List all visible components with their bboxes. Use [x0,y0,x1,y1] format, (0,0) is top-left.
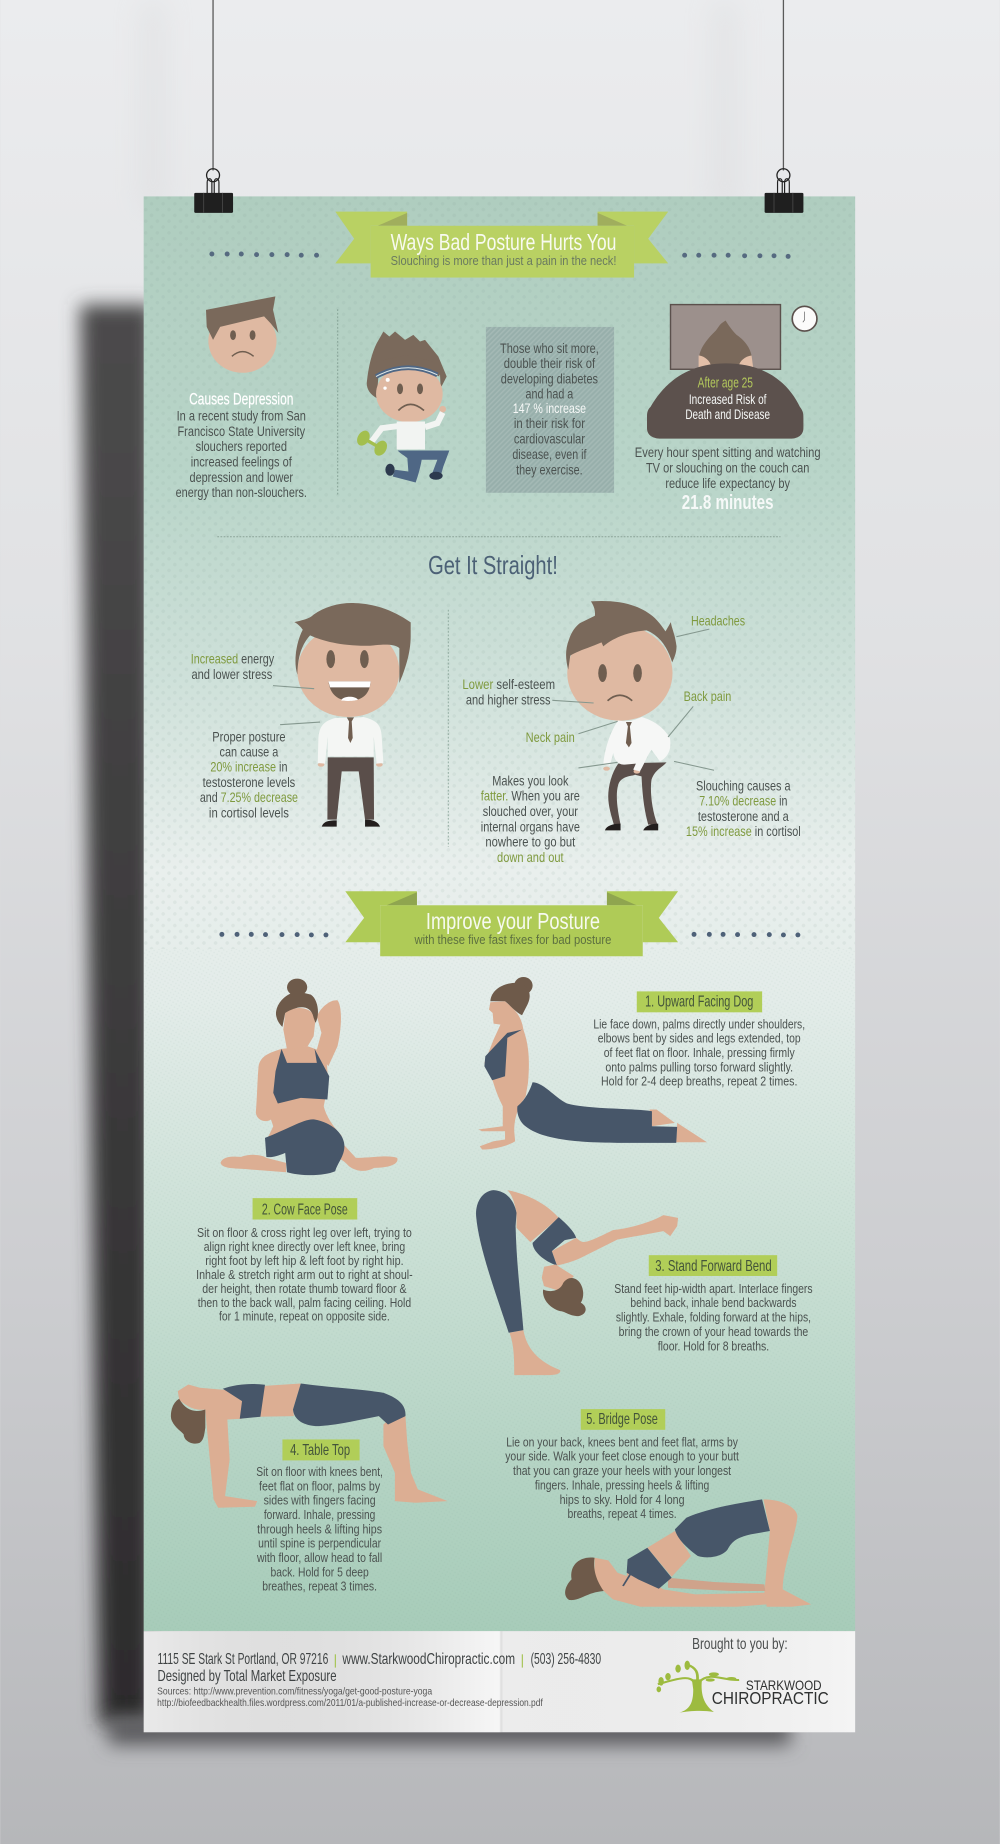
text: table top instructions: breathes, repeat 3 times. [262,1580,377,1594]
text: upward facing dog instructions: Hold for 2-4 deep breaths, repeat 2 times. [601,1074,797,1088]
callout: slouching causes: 15% increase in cortisol [686,824,801,839]
logo: starkwood chiropractic: CHIROPRACTIC [712,1688,829,1708]
text: cow face instructions: Inhale & stretch right arm out to right at shoul- [196,1268,413,1282]
callout: increased energy: Increased energy [191,652,274,667]
text: table top instructions [256,1465,383,1594]
logo: starkwood chiropractic [657,1661,829,1713]
footer: contact details: (503) 256-4830 [531,1651,601,1668]
label: table top: 4. Table Top [290,1442,350,1459]
callout: proper posture [200,722,320,821]
text: upward facing dog instructions [593,1017,805,1088]
banner: ways bad posture hurts you [335,212,668,278]
icon: exercising man with headband [354,332,449,482]
footer: sources: http://biofeedbackhealth.files.wordpress.com/2011/01/a-published-increase-or-decrease-depression.pdf [157,1698,543,1709]
callout: increased energy [191,652,314,689]
text: upward facing dog instructions: Lie face down, palms directly under shoulders, [593,1017,805,1031]
text: table top instructions: sides with fingers facing [264,1494,376,1508]
subheading: with these five fast fixes for bad posture [414,933,611,947]
text: cow face instructions: right foot by left hip & left foot by right hip. [205,1254,404,1268]
text: cow face instructions: Sit on floor & cross right leg over left, trying to [197,1226,412,1240]
callout: makes you look fatter: slouched over, your [483,804,578,819]
callout: makes you look fatter: nowhere to go but [485,835,576,850]
label: bridge pose [581,1409,665,1430]
icon: tv and couch viewer: Death and Disease [685,407,770,422]
callout: neck pain: Neck pain [526,730,575,745]
icon: tv and couch viewer [647,305,803,439]
text: table top instructions: Sit on floor with knees bent, [256,1465,383,1479]
text: causes depression: In a recent study from San [177,408,306,423]
text: causes depression: slouchers reported [196,439,287,454]
footer: contact details: 1115 SE Stark St Portland, OR 97216 [158,1651,328,1668]
text: cow face instructions: align right knee directly over left knee, bring [204,1240,405,1254]
text: table top instructions: back. Hold for 5 deep [270,1565,369,1579]
text: forward bend instructions: floor. Hold for 8 breaths. [658,1339,769,1353]
text: table top instructions: until spine is perpendicular [258,1537,382,1551]
callout: proper posture: and 7.25% decrease [200,790,298,805]
logo: starkwood chiropractic: STARKWOOD [746,1678,822,1693]
text: bridge pose instructions: hips to sky. Hold for 4 long [560,1493,685,1507]
binder clip left [194,169,233,213]
character: slouching man [566,601,677,830]
footer: contact details: Designed by Total Market Exposure [158,1668,337,1685]
text: table top instructions: with floor, allow head to fall [256,1551,382,1565]
text: upward facing dog instructions: onto palms pulling torso forward slightly. [605,1060,793,1074]
footer: sources [157,1687,543,1709]
subheading: Slouching is more than just a pain in the neck! [391,254,616,268]
dotted rule left [209,252,319,258]
callout: headaches: Headaches [691,613,745,628]
panel: diabetes statistic [486,327,614,493]
text: bridge pose instructions: Lie on your back, knees bent and feet flat, arms by [506,1436,738,1450]
callout: proper posture: in cortisol levels [209,806,289,821]
label: stand forward bend: 3. Stand Forward Bend [655,1258,772,1275]
dotted rule right lower [692,932,800,937]
callout: makes you look fatter [481,762,618,865]
callout: slouching causes: Slouching causes a [696,778,791,793]
callout: neck pain [526,721,618,745]
heading: Ways Bad Posture Hurts You [391,229,616,255]
label: cow face pose [253,1198,357,1220]
dotted rule right [682,253,791,259]
callout: lower self-esteem: and higher stress [466,692,551,707]
label: table top [282,1439,360,1460]
text: cow face instructions: der height, then rotate thumb toward floor & [202,1282,407,1296]
hanging wire left [212,0,214,171]
text: bridge pose instructions: that you can graze your heels with your longest [513,1464,731,1478]
callout: lower self-esteem [462,677,594,707]
label: stand forward bend [649,1255,777,1276]
text: table top instructions: forward. Inhale, pressing [264,1508,375,1522]
panel: diabetes statistic: in their risk for [514,416,585,431]
text: causes depression [176,391,307,500]
icon: tv and couch viewer: After age 25 [698,375,753,391]
callout: proper posture: can cause a [220,745,279,760]
callout: headaches [676,613,745,637]
callout: slouching causes: testosterone and a [698,809,789,824]
poster [144,196,855,1732]
callout: lower self-esteem: Lower self-esteem [462,677,555,692]
text: life expectancy: reduce life expectancy by [665,476,790,491]
callout: back pain: Back pain [684,689,731,704]
heading: get it straight: Get It Straight! [428,552,558,580]
label: cow face pose: 2. Cow Face Pose [262,1201,348,1218]
binder clip right [765,169,803,213]
figure: stand forward bend [476,1190,678,1375]
text: cow face instructions: for 1 minute, repeat on opposite side. [219,1310,390,1324]
figure: bridge pose [565,1499,811,1607]
label: upward facing dog: 1. Upward Facing Dog [645,993,753,1010]
text: forward bend instructions: behind back, inhale bend backwards [630,1296,797,1310]
panel: diabetes statistic: double their risk of [504,356,595,371]
text: bridge pose instructions: fingers. Inhale, pressing heels & lifting [535,1478,709,1492]
text: table top instructions: feet flat on floor, palms by [259,1479,381,1493]
text: life expectancy: Every hour spent sitting and watching [635,445,821,460]
panel: diabetes statistic: developing diabetes [501,371,598,386]
footer: sources: Sources: http://www.prevention.com/fitness/yoga/get-good-posture-yoga [157,1687,432,1698]
text: table top instructions: through heels & lifting hips [257,1522,382,1536]
text: bridge pose instructions: your side. Walk your feet close enough to your butt [505,1450,739,1464]
text: forward bend instructions: Stand feet hip-width apart. Interlace fingers [614,1282,813,1296]
panel: diabetes statistic: they exercise. [516,462,583,477]
text: forward bend instructions: bring the crown of your head towards the [619,1325,808,1339]
callout: makes you look fatter: fatter. When you are [481,789,580,804]
callout: proper posture: testosterone levels [203,775,295,790]
panel: diabetes statistic: cardiovascular [514,431,585,446]
icon: sad face [206,296,278,373]
figure: cow face pose [220,979,397,1175]
character: good posture man [294,603,411,827]
footer: contact details: www.StarkwoodChiropractic.com [342,1651,515,1668]
figure: upward facing dog [478,977,707,1150]
text: cow face instructions [196,1226,413,1324]
callout: proper posture: 20% increase in [210,759,287,774]
callout: slouching causes [674,761,801,839]
text: upward facing dog instructions: of feet flat on floor. Inhale, pressing firmly [604,1046,795,1060]
footer: contact details [158,1651,601,1685]
text: causes depression: Francisco State University [177,424,305,439]
callout: makes you look fatter: down and out [497,850,564,865]
text: causes depression: depression and lower [190,470,293,485]
text: causes depression: energy than non-slouchers. [176,485,307,500]
banner: improve your posture [345,891,678,956]
poster shadow [80,305,790,1745]
panel: diabetes statistic: Those who sit more, [500,341,599,356]
text: life expectancy: TV or slouching on the couch can [646,460,809,475]
panel: diabetes statistic: 147 % increase [513,401,586,416]
text: upward facing dog instructions: elbows bent by sides and legs extended, top [598,1032,801,1046]
text: cow face instructions: then to the back wall, palm facing ceiling. Hold [198,1296,411,1310]
label: upward facing dog [637,991,762,1012]
text: bridge pose instructions [505,1436,739,1521]
callout: back pain [668,689,731,737]
text: causes depression: increased feelings of [191,454,292,469]
panel: diabetes statistic: and had a [526,387,574,402]
hanging wire right [782,0,784,171]
text: bridge pose instructions: breaths, repeat 4 times. [567,1507,677,1521]
callout: makes you look fatter: internal organs have [481,819,580,834]
label: bridge pose: 5. Bridge Pose [586,1411,658,1428]
dotted rule left lower [219,932,328,937]
text: causes depression: Causes Depression [189,391,293,409]
figure: table top [171,1383,448,1508]
heading: Improve your Posture [426,908,600,934]
text: forward bend instructions: slightly. Exhale, folding forward at the hips, [616,1310,811,1324]
icon: clock [792,306,817,331]
footer: brought to you by: Brought to you by: [692,1636,788,1653]
text: forward bend instructions [614,1282,813,1353]
panel: diabetes statistic: disease, even if [512,447,587,462]
text: life expectancy: 21.8 minutes [682,492,774,514]
callout: proper posture: Proper posture [212,729,286,744]
callout: makes you look fatter: Makes you look [492,773,569,788]
text: life expectancy [635,445,821,514]
icon: tv and couch viewer: Increased Risk of [689,392,767,407]
callout: increased energy: and lower stress [191,667,272,682]
callout: slouching causes: 7.10% decrease in [699,794,787,809]
